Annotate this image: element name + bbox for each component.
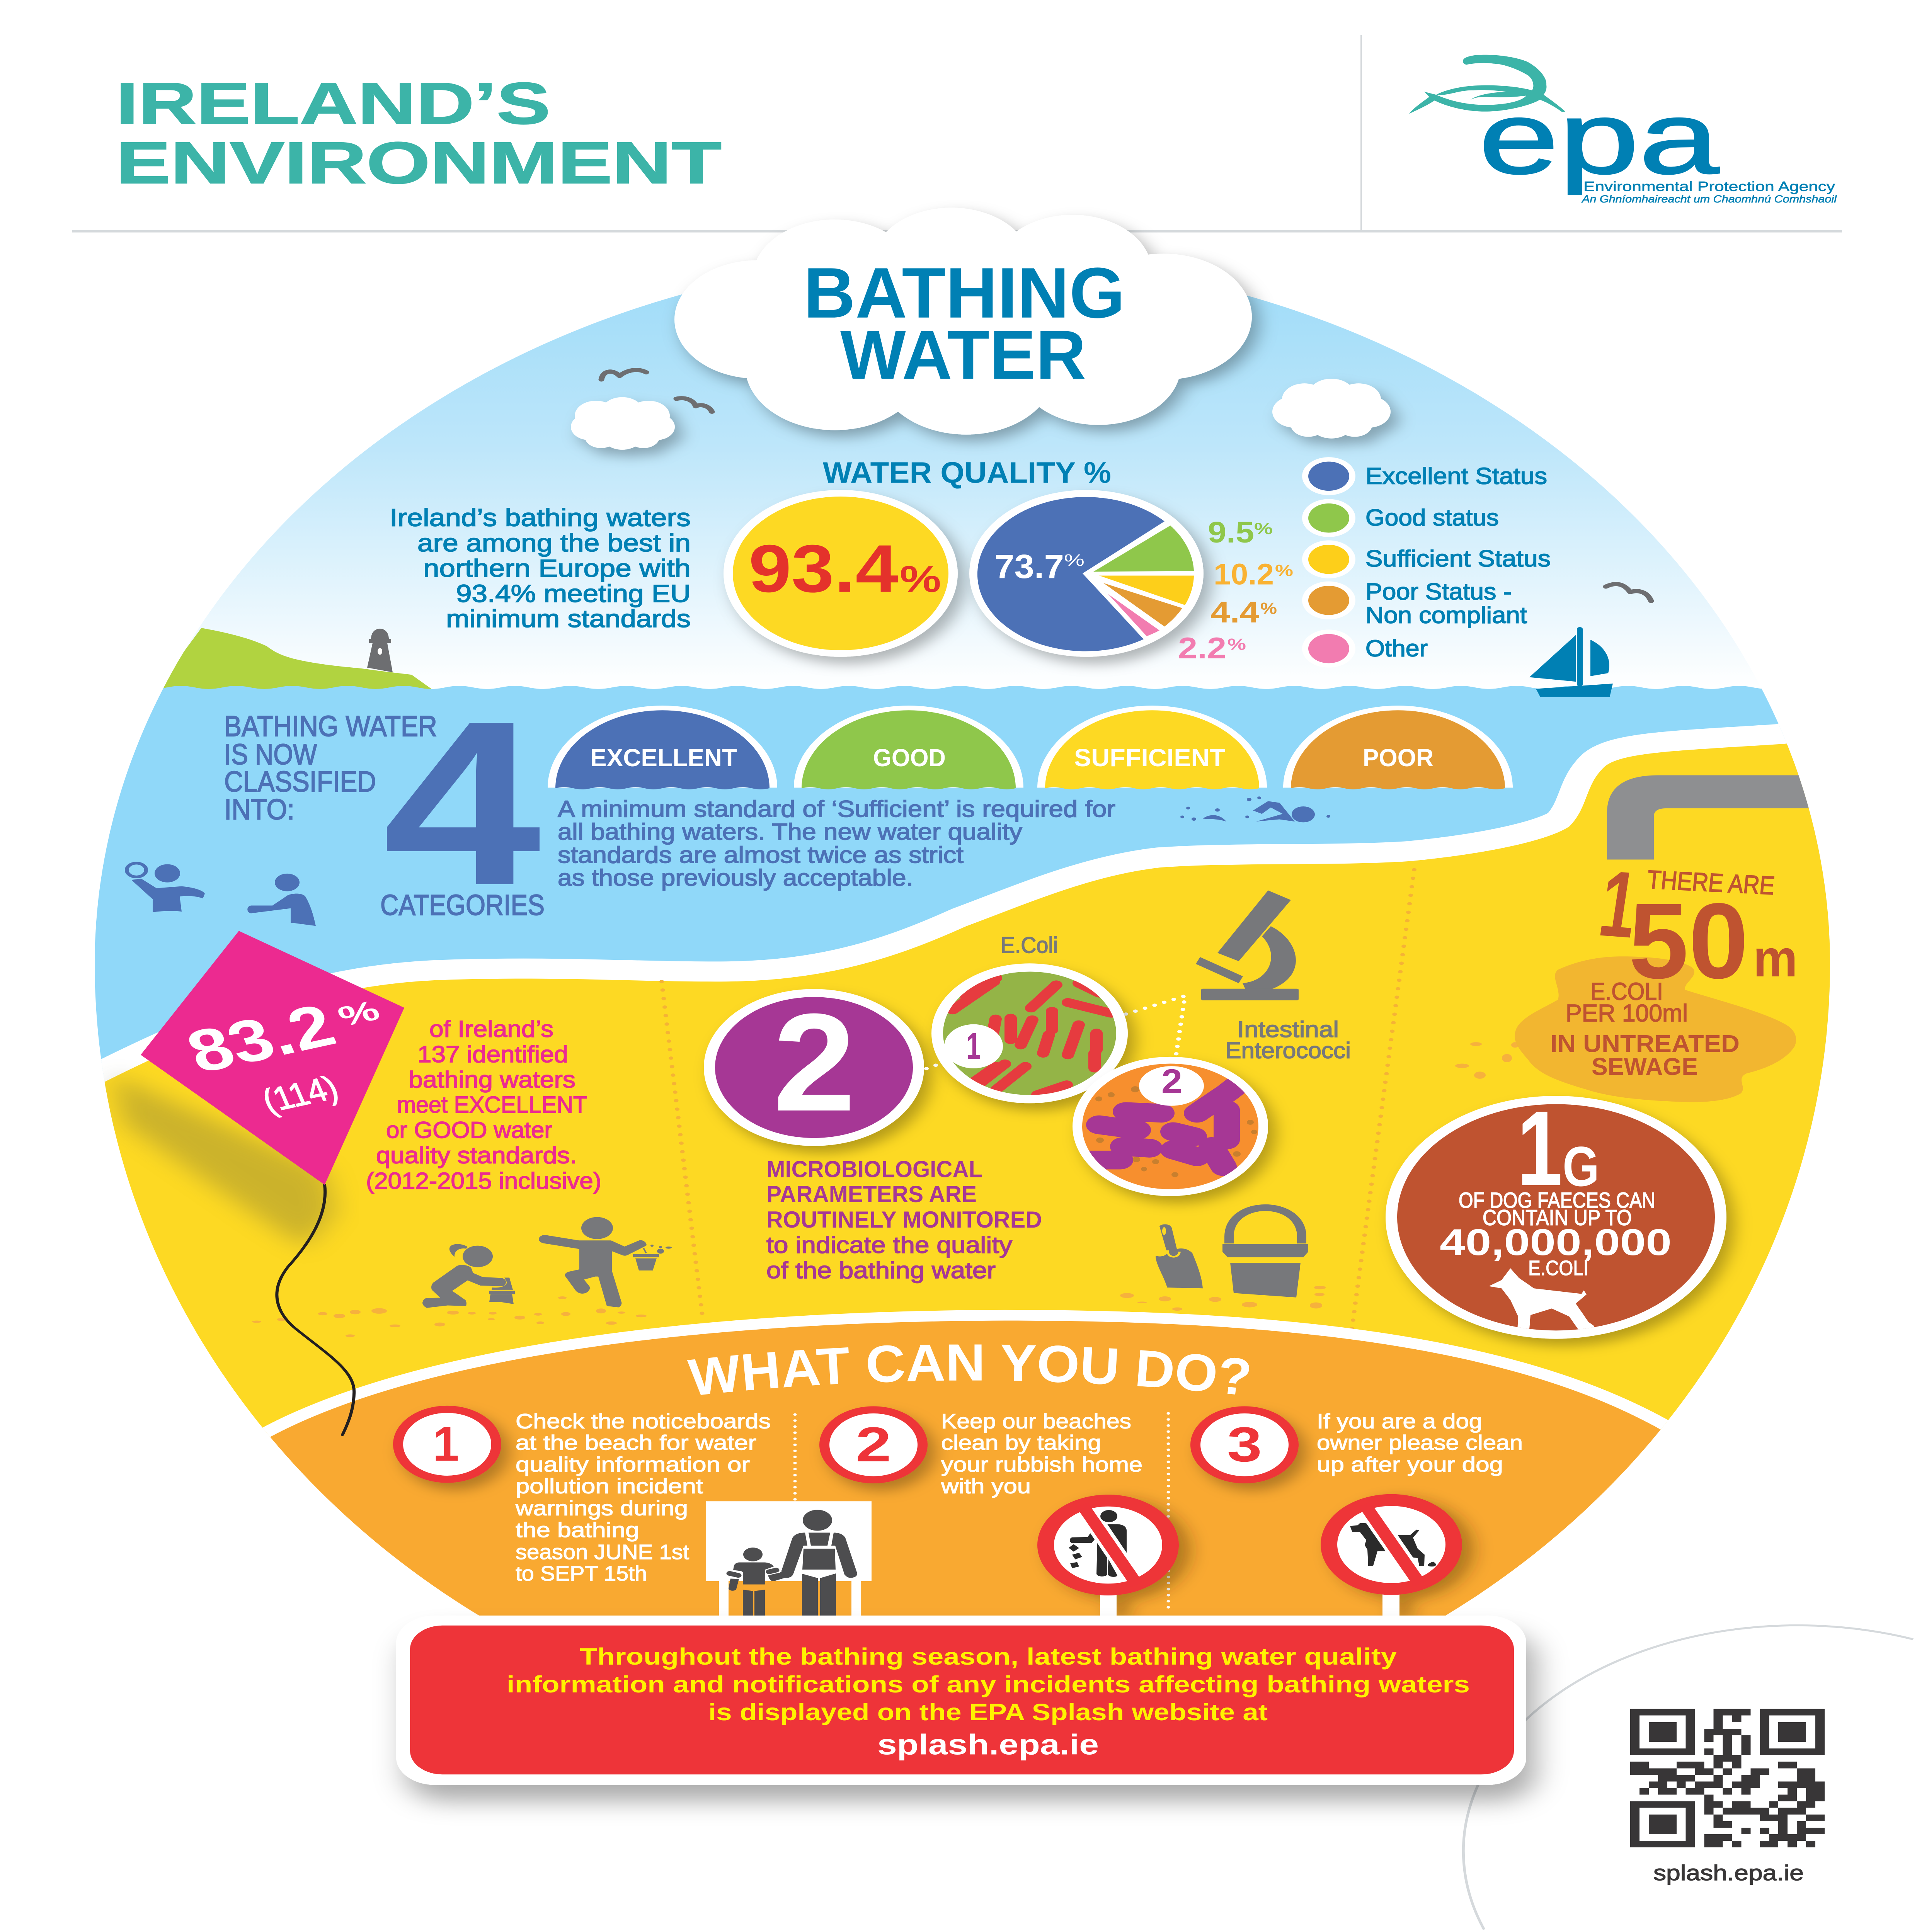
purple text: PARAMETERS ARE [766, 1182, 977, 1207]
pie chart: water quality [969, 490, 1204, 657]
title: Ireland's Environment: IRELAND’S [116, 71, 550, 136]
dome labels: GOOD [873, 744, 946, 772]
title: Ireland's Environment [116, 71, 722, 196]
sewage pool [1515, 956, 1796, 1102]
kite tail [277, 1185, 354, 1435]
classified text: IS NOW [224, 738, 317, 770]
legend: Good status [1365, 505, 1499, 531]
pie labels: % [1260, 599, 1277, 617]
legend: Excellent Status [1365, 463, 1547, 489]
purple text: MICROBIOLOGICAL [766, 1156, 982, 1182]
big cloud with heading [674, 207, 1252, 435]
intro text: northern Europe with [423, 554, 691, 582]
sand dots [252, 1042, 1519, 1337]
dotted dividers [662, 870, 1414, 1337]
step 2 text: your rubbish home [941, 1452, 1142, 1476]
heading: bathing water: BATHING [804, 253, 1125, 333]
banner: splash website: Throughout the bathing season, latest bathing water quality [580, 1643, 1397, 1670]
stat circle: dog faeces [1386, 1089, 1726, 1339]
kite [141, 931, 404, 1435]
pie labels: 4.4 [1210, 595, 1259, 629]
dotted dividers [795, 1413, 1168, 1613]
heading: bathing water: WATER [840, 316, 1086, 394]
dome labels: POOR [1363, 744, 1433, 772]
step 2 badge [819, 1406, 928, 1483]
dome labels: SUFFICIENT [1074, 744, 1225, 772]
pie labels: 2.2 [1178, 631, 1226, 665]
dome labels [590, 744, 1433, 772]
pie labels: 10.2 [1214, 558, 1274, 591]
icon: boy with bucket [539, 1217, 672, 1307]
pie chart: water quality: 73.7 [994, 548, 1064, 585]
icon: swimmer [1180, 796, 1330, 822]
dome: sufficient [1037, 706, 1267, 789]
heading: bathing water [804, 253, 1125, 394]
sewage stat: SEWAGE [1592, 1053, 1698, 1080]
sewage stat: m [1753, 929, 1798, 987]
decorative arc [1463, 1625, 1913, 1930]
label: categories: CATEGORIES [380, 889, 545, 921]
stat circle: 93.4%: 93.4 [749, 531, 898, 606]
step 1 noticeboard with people [706, 1501, 872, 1616]
step 1 text: at the beach for water [516, 1431, 756, 1454]
sea [0, 686, 1837, 1129]
step 3 badge [1190, 1406, 1299, 1483]
step 1 text [515, 1409, 771, 1585]
pink text: bathing waters [409, 1067, 575, 1093]
legend: Poor Status - [1365, 579, 1512, 605]
pink text: or GOOD water [386, 1117, 552, 1143]
standards paragraph [558, 796, 1115, 891]
kite stat: 83.2 [177, 992, 345, 1085]
step 1 text: the bathing [516, 1518, 639, 1541]
stat circle: dog faeces: OF DOG FAECES CAN [1459, 1188, 1655, 1213]
legend [1302, 457, 1551, 668]
stat circle: 93.4% [724, 490, 958, 657]
step 3 text: up after your dog [1317, 1452, 1503, 1476]
sewage stat [1550, 851, 1798, 1080]
pie labels [1178, 515, 1293, 665]
header rule [72, 230, 1842, 233]
pink text: 137 identified [417, 1042, 568, 1067]
sewage stat: 50 [1629, 881, 1748, 1001]
step 1 text: pollution incident [516, 1474, 703, 1498]
banner: splash website: information and notifications of any incidents affecting bathing waters [507, 1671, 1470, 1697]
logo: EPA [1409, 55, 1837, 205]
purple text: to indicate the quality [766, 1232, 1012, 1258]
sewage stat: IN UNTREATED [1550, 1031, 1740, 1058]
banner: splash website [396, 1616, 1526, 1785]
step 3 text [1317, 1409, 1523, 1476]
classified text: CLASSIFIED [224, 765, 376, 798]
label: intestinal enterococci: Enterococci [1225, 1038, 1351, 1063]
label: intestinal enterococci [1225, 1017, 1351, 1063]
heading: what can you do: WHAT CAN YOU DO? [686, 1333, 1255, 1407]
icon: bucket and spade [1156, 1208, 1308, 1298]
bacteria circle: intestinal enterococci [1073, 1057, 1268, 1196]
icon: sailing boat [1529, 627, 1613, 697]
bacteria circle: e.coli: 1 [966, 1026, 981, 1067]
pink text: quality standards. [376, 1143, 577, 1168]
step 2 badge: 2 [856, 1417, 891, 1472]
step 3 text: owner please clean [1317, 1431, 1523, 1454]
small cloud left [571, 397, 675, 450]
title: Ireland's Environment: ENVIRONMENT [116, 130, 722, 196]
intro text [390, 503, 691, 633]
stat circle: dog faeces: E.COLI [1528, 1256, 1588, 1280]
classified text: BATHING WATER [224, 710, 437, 743]
intro text: Ireland’s bathing waters [390, 503, 691, 531]
icon: microscope [1196, 890, 1299, 1000]
step 1 badge [393, 1406, 501, 1483]
step 1 text: Check the noticeboards [516, 1409, 771, 1433]
standards paragraph: A minimum standard of ‘Sufficient’ is required for [558, 796, 1115, 822]
pink text: meet EXCELLENT [397, 1092, 587, 1118]
sewage stat: PER 100ml [1566, 1000, 1688, 1027]
purple text [766, 1156, 1042, 1283]
QR code [1630, 1709, 1825, 1847]
standards paragraph: as those previously acceptable. [558, 865, 913, 891]
stat circle: dog faeces: CONTAIN UP TO [1483, 1205, 1632, 1230]
logo: EPA: Environmental Protection Agency [1583, 179, 1835, 194]
sewage stat: 1 [1593, 851, 1644, 957]
standards paragraph: all bathing waters. The new water quality [558, 819, 1022, 845]
big number 4: 4 [383, 672, 543, 934]
legend: Other [1365, 636, 1428, 662]
pipe [1607, 775, 1840, 860]
legend: Non compliant [1365, 602, 1527, 628]
what can you do section [393, 1333, 1523, 1616]
stat circle: dog faeces: G [1563, 1135, 1599, 1198]
pink text [366, 1016, 601, 1194]
classified text [224, 710, 437, 826]
banner: splash website: is displayed on the EPA Splash website at [708, 1699, 1268, 1725]
sewage stat: THERE ARE [1646, 865, 1776, 900]
cloud shape [674, 207, 1252, 435]
purple text: of the bathing water [766, 1258, 996, 1283]
step 1 text: quality information or [516, 1452, 750, 1476]
step 2 no littering sign [1037, 1495, 1179, 1616]
step 3 no dog fouling sign [1321, 1494, 1462, 1616]
stat circle: dog faeces: 40,000,000 [1440, 1221, 1672, 1263]
yellow beach [39, 738, 1855, 1487]
icon: wading person [247, 874, 316, 926]
QR label: splash.epa.ie [1653, 1861, 1804, 1885]
dome: poor [1283, 706, 1513, 789]
stat circle: dog faeces: 1 [1517, 1089, 1563, 1208]
logo: EPA: An Ghníomhaireacht um Chaomhnú Comhshaoil [1581, 193, 1837, 205]
banner: splash website: splash.epa.ie [877, 1729, 1099, 1761]
dome: good [794, 706, 1023, 789]
classified text: INTO: [224, 793, 295, 826]
panel: main egg scene [95, 294, 1830, 1616]
step 1 text: season JUNE 1st [516, 1540, 689, 1563]
logo: EPA: epa [1479, 81, 1720, 196]
heading: water quality: WATER QUALITY % [823, 456, 1111, 489]
pie chart: water quality: % [1064, 551, 1084, 570]
legend: Sufficient Status [1365, 546, 1551, 571]
intro text: 93.4% meeting EU [456, 580, 691, 607]
icon: lighthouse [367, 629, 393, 672]
pink text: (2012-2015 inclusive) [366, 1168, 601, 1194]
green hill [155, 628, 435, 691]
icon: dog [1489, 1268, 1594, 1338]
dome: excellent [548, 706, 777, 789]
icon: girl with sandcastle [422, 1244, 515, 1308]
step 1 text: to SEPT 15th [516, 1561, 647, 1585]
pink text: of Ireland’s [429, 1016, 553, 1042]
step 2 text: with you [941, 1474, 1031, 1498]
step 3 text: If you are a dog [1317, 1409, 1482, 1433]
dome labels: EXCELLENT [590, 744, 737, 772]
pie labels: % [1227, 635, 1246, 653]
kite: (114) [257, 1069, 344, 1119]
what can you do panel background [193, 1321, 1739, 1616]
stat circle: 2 parameters: 2 [773, 985, 856, 1140]
sewage stat: E.COLI [1590, 978, 1663, 1005]
label: intestinal enterococci: Intestinal [1237, 1017, 1339, 1042]
step 2 text [941, 1409, 1142, 1498]
pie labels: 9.5 [1208, 515, 1254, 549]
step 1 text: warnings during [515, 1496, 688, 1520]
dotted connectors [926, 996, 1185, 1069]
kite: % [333, 995, 385, 1032]
kite shadow [112, 1074, 336, 1248]
step 2 text: clean by taking [941, 1431, 1101, 1454]
icon: birds [601, 370, 1651, 601]
bacteria circle: e.coli [931, 963, 1128, 1103]
bacteria circle: intestinal enterococci: 2 [1161, 1062, 1182, 1101]
icon: water polo player [127, 863, 205, 912]
pie labels: % [1275, 561, 1293, 579]
stat circle: 93.4%: % [900, 558, 941, 600]
stat circle: 2 parameters [704, 985, 924, 1146]
label: e.coli: E.Coli [1001, 933, 1058, 958]
intro text: are among the best in [417, 529, 691, 557]
step 2 text: Keep our beaches [941, 1409, 1131, 1433]
purple text: ROUTINELY MONITORED [766, 1207, 1042, 1233]
step 1 badge: 1 [433, 1417, 459, 1471]
category domes [548, 706, 1513, 789]
sky [185, 294, 1745, 659]
intro text: minimum standards [446, 605, 691, 633]
standards paragraph: standards are almost twice as strict [558, 842, 964, 868]
step 3 badge: 3 [1227, 1417, 1262, 1472]
pie labels: % [1254, 519, 1273, 537]
small cloud right [1272, 379, 1391, 439]
kite body [141, 931, 404, 1185]
